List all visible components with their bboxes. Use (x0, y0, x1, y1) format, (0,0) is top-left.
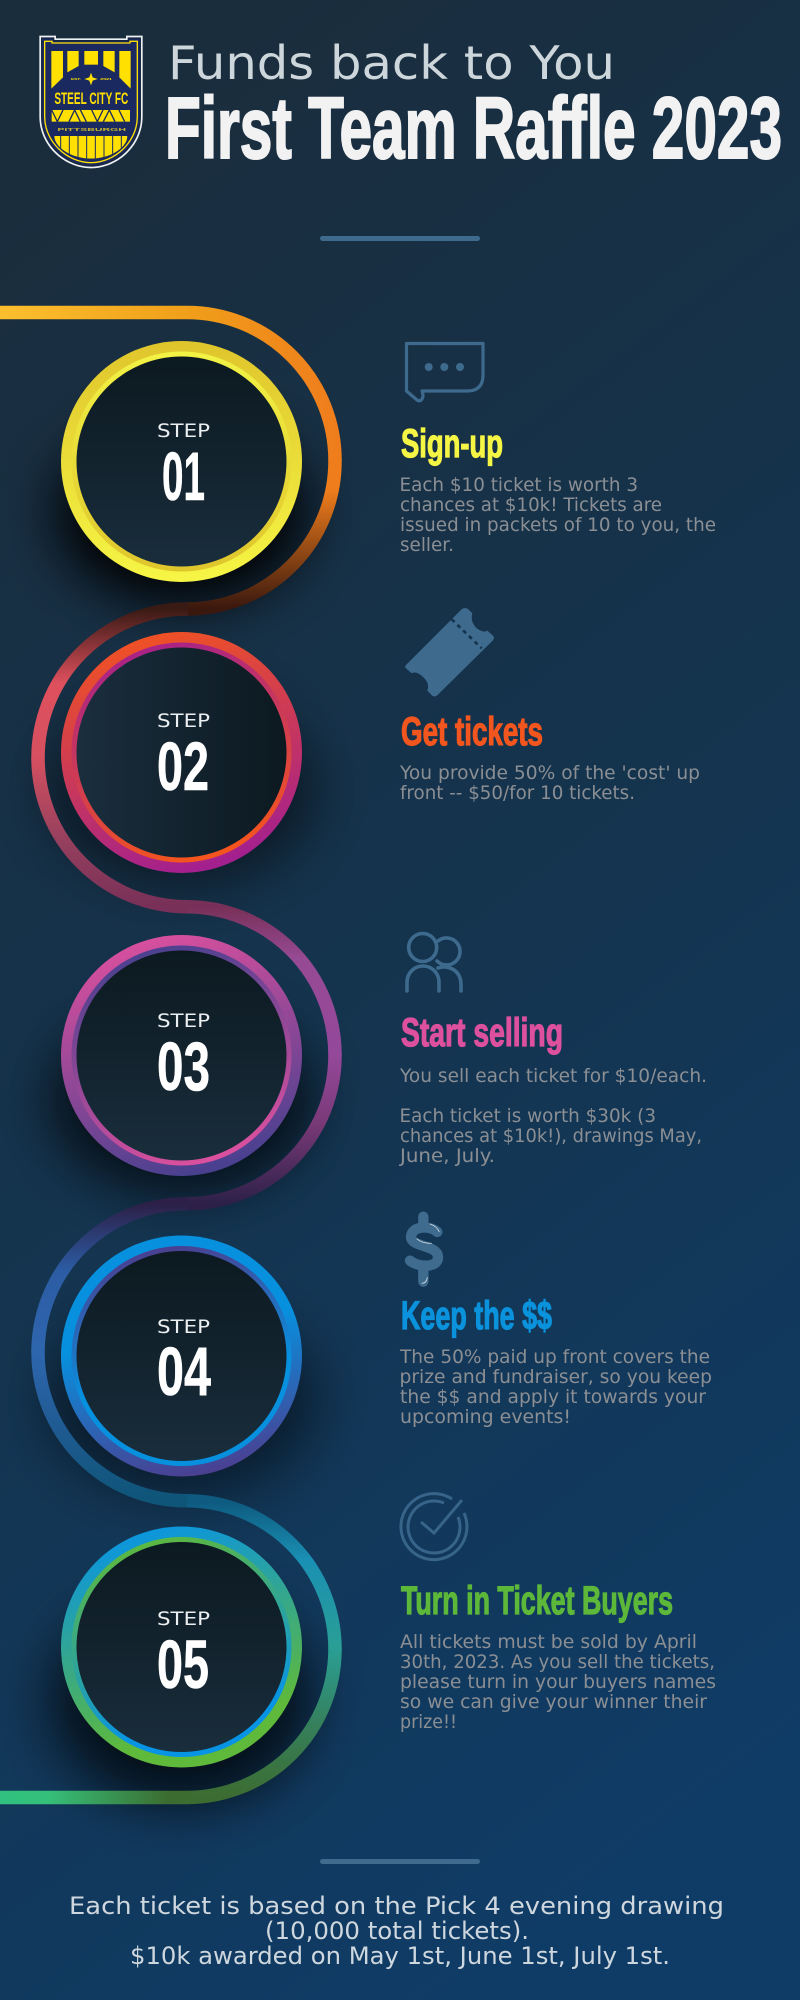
text: step 5 description (400, 1631, 716, 1733)
heading: Turn in Ticket Buyers: Turn in Ticket Buyers (401, 1579, 673, 1623)
connector: winding gradient path (0, 312, 335, 1798)
text: step 3 description (399, 1065, 707, 1167)
text: step 5 description: please turn in your buyers names (400, 1671, 716, 1693)
step 01 badge (61, 341, 302, 582)
text: step 5 description: 30th, 2023. As you sell the tickets, (400, 1651, 715, 1673)
logo: Steel City FC crest (39, 36, 143, 168)
text: step 4 description: The 50% paid up front covers the (399, 1346, 710, 1368)
title line: Funds back to You: Funds back to You (168, 36, 615, 90)
step 04 badge: STEP (157, 1316, 210, 1338)
icon: dollar sign (410, 1217, 439, 1283)
step 05 badge: 05 (157, 1626, 209, 1703)
step 05 badge (61, 1526, 302, 1768)
divider: top (320, 236, 480, 241)
icon: two people (407, 934, 461, 991)
step 04 badge (61, 1236, 302, 1476)
text: step 4 description (399, 1346, 712, 1428)
logo: Steel City FC crest: 2021 (100, 77, 113, 81)
step 04 badge: 04 (157, 1333, 211, 1410)
step 03 badge: 03 (157, 1028, 210, 1105)
text: step 1 description: issued in packets of 10 to you, the (400, 514, 716, 536)
footer note (69, 1892, 724, 1970)
logo: Steel City FC crest: PITTSBURGH (57, 127, 126, 132)
step 02 badge: STEP (157, 710, 210, 732)
heading: Sign-up: Sign-up (401, 422, 503, 466)
step 01 badge: STEP (157, 420, 210, 442)
heading: Start selling: Start selling (401, 1011, 563, 1055)
text: step 1 description (400, 474, 716, 556)
step 05 badge: STEP (157, 1608, 210, 1630)
icon: check mark in circle (401, 1494, 467, 1560)
text: step 4 description: prize and fundraiser, so you keep (400, 1366, 712, 1388)
text: step 5 description: so we can give your winner their (400, 1691, 707, 1713)
icon: ticket (405, 608, 494, 696)
step 03 badge: STEP (157, 1010, 210, 1032)
logo: Steel City FC crest: EST. (71, 77, 81, 81)
text: step 5 description: All tickets must be sold by April (400, 1631, 697, 1653)
step 02 badge: 02 (157, 728, 209, 805)
divider: bottom (320, 1859, 480, 1864)
text: step 4 description: upcoming events! (400, 1406, 571, 1428)
step 03 badge (61, 935, 302, 1176)
heading: Get tickets: Get tickets (401, 710, 543, 754)
text: step 4 description: the $$ and apply it towards your (400, 1386, 706, 1408)
footer note: Each ticket is based on the Pick 4 evening drawing (69, 1892, 724, 1920)
logo: Steel City FC crest: STEEL CITY FC (54, 89, 128, 108)
step 01 badge: 01 (162, 438, 205, 515)
footer note: $10k awarded on May 1st, June 1st, July 1st. (130, 1942, 670, 1970)
footer note: (10,000 total tickets). (265, 1917, 529, 1945)
text: step 2 description: You provide 50% of the 'cost' up (399, 762, 700, 784)
text: step 5 description: prize!! (400, 1711, 457, 1733)
text: step 3 description: June, July. (399, 1145, 495, 1167)
text: step 2 description (399, 762, 700, 804)
icon: speech bubble (406, 344, 483, 401)
text: step 3 description: You sell each ticket for $10/each. (399, 1065, 707, 1087)
text: step 2 description: front -- $50/for 10 tickets. (400, 782, 635, 804)
badge drop shadows (46, 420, 316, 1805)
text: step 1 description: chances at $10k! Tickets are (400, 494, 662, 516)
heading: Keep the $$: Keep the $$ (401, 1294, 552, 1338)
text: step 3 description: Each ticket is worth $30k (3 (400, 1105, 656, 1127)
text: step 3 description: chances at $10k!), drawings May, (400, 1125, 702, 1147)
text: step 1 description: Each $10 ticket is worth 3 (400, 474, 638, 496)
text: step 1 description: seller. (400, 534, 454, 556)
step 02 badge (61, 632, 302, 873)
